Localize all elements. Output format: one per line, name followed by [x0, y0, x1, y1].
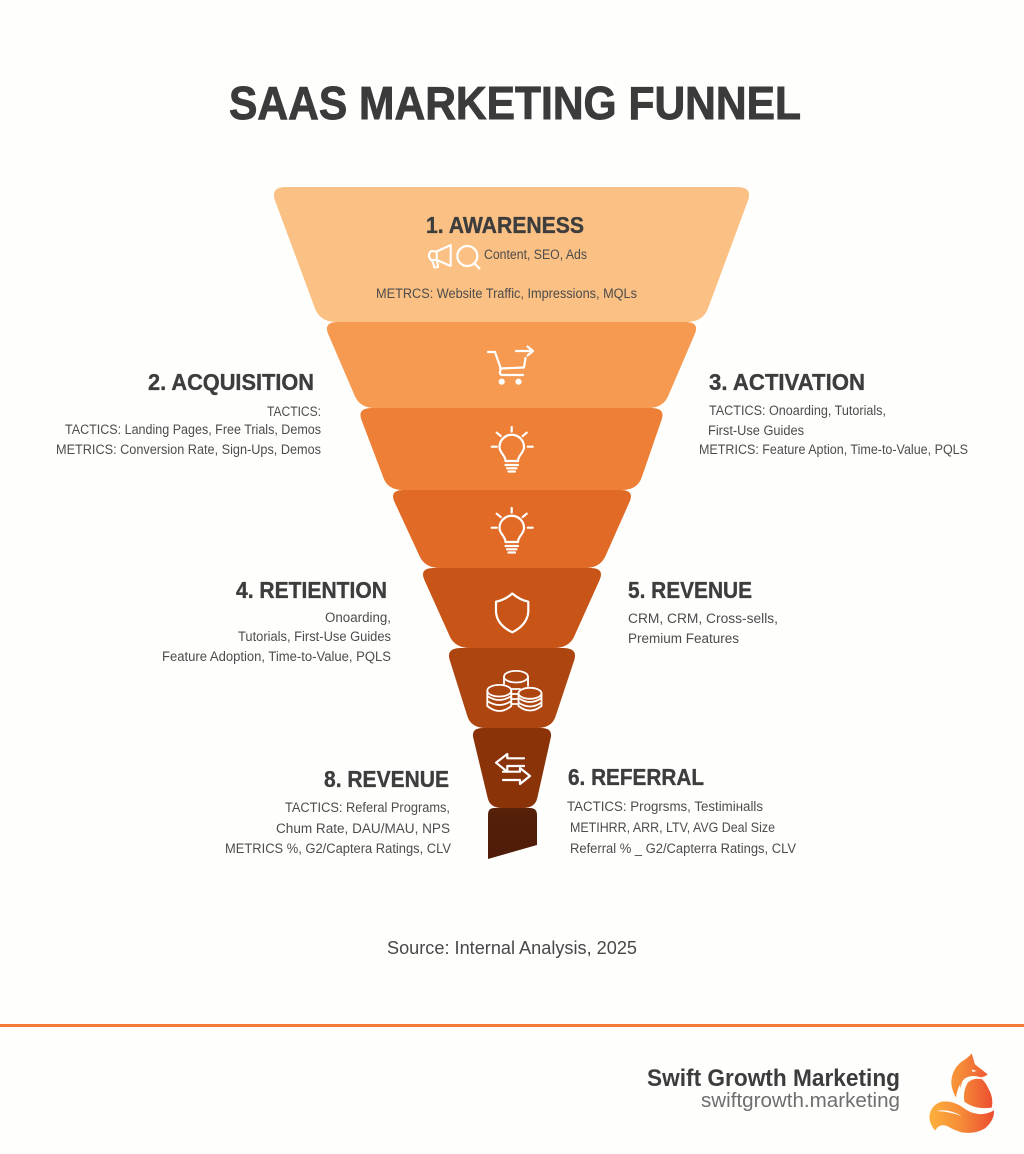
label: 8. revenue	[225, 766, 451, 856]
acquisition heading: 2. ACQUISITION	[148, 369, 314, 395]
activation tactics and metrics: First-Use Guides	[708, 423, 804, 438]
label: 2. acquisition	[56, 369, 321, 457]
icon: coins	[487, 671, 542, 711]
stage 1 metrics: METRCS: Website Traffic, Impressions, MQLs	[376, 286, 637, 301]
funnel stage 6	[449, 648, 575, 728]
revenue details	[628, 611, 778, 646]
retention heading: 4. RETIENTION	[236, 577, 387, 603]
icon: light bulb	[492, 427, 533, 472]
footer brand	[647, 1053, 994, 1133]
acquisition tactics and metrics	[56, 404, 321, 457]
retention details: Onoarding,	[325, 610, 391, 625]
funnel stage 7	[473, 728, 551, 808]
activation heading: 3. ACTIVATION	[709, 369, 865, 395]
revenue details	[225, 800, 451, 856]
title: SAAS MARKETING FUNNEL	[229, 77, 801, 129]
referral details	[567, 799, 796, 856]
funnel stage 2	[327, 322, 696, 408]
source note: Source: Internal Analysis, 2025	[387, 938, 637, 958]
funnel stage 4	[393, 490, 631, 568]
label: 6. referral	[567, 764, 796, 856]
referral heading: 6. REFERRAL	[568, 764, 704, 790]
label: 5. revenue	[628, 577, 778, 646]
revenue details: Chum Rate, DAU/MAU, NPS	[276, 821, 450, 836]
brand name: Swift Growth Marketing	[647, 1065, 900, 1092]
funnel	[274, 187, 749, 859]
acquisition tactics and metrics: METRICS: Conversion Rate, Sign-Ups, Demos	[56, 442, 321, 457]
activation tactics and metrics	[699, 403, 968, 457]
stage 1 tactics: Content, SEO, Ads	[484, 247, 587, 262]
acquisition tactics and metrics: TACTICS:	[267, 404, 321, 419]
funnel stage 5	[423, 568, 601, 648]
acquisition tactics and metrics: TACTICS: Landing Pages, Free Trials, Demos	[65, 422, 321, 437]
icon: magnifier	[457, 246, 480, 268]
funnel stage 1: awareness	[274, 187, 749, 322]
label: 3. activation	[699, 369, 968, 457]
revenue details: METRICS %, G2/Captera Ratings, CLV	[225, 841, 451, 856]
funnel stage 3	[360, 408, 663, 490]
revenue heading: 8. REVENUE	[324, 766, 449, 792]
funnel stage 8	[488, 808, 537, 859]
icon: light bulb	[492, 508, 533, 552]
icon: shopping cart	[488, 346, 533, 384]
revenue details: TACTICS: Referal Programs,	[285, 800, 450, 815]
label: 4. retention	[162, 577, 391, 664]
revenue details: Premium Features	[628, 631, 739, 646]
retention details: Tutorials, First-Use Guides	[238, 629, 391, 644]
revenue details: CRM, CRM, Cross-sells,	[628, 611, 778, 626]
retention details: Feature Adoption, Time-to-Value, PQLS	[162, 649, 391, 664]
icon: shield	[496, 594, 528, 632]
revenue heading: 5. REVENUE	[628, 577, 752, 603]
stage 1 heading: 1. AWARENESS	[426, 212, 584, 238]
icon: exchange arrows	[496, 754, 530, 784]
referral details: TACTICS: Progrsms, Testimiнalls	[567, 799, 763, 814]
icon: fox logo	[929, 1053, 994, 1133]
brand url: swiftgrowth.marketing	[701, 1090, 900, 1112]
activation tactics and metrics: TACTICS: Onoarding, Tutorials,	[709, 403, 886, 418]
referral details: METIHRR, ARR, LTV, AVG Deal Size	[570, 820, 775, 835]
icon: megaphone	[429, 245, 451, 268]
retention details	[162, 610, 391, 664]
activation tactics and metrics: METRICS: Feature Aption, Time-to-Value, PQLS	[699, 442, 968, 457]
referral details: Referral % _ G2/Capterra Ratings, CLV	[570, 841, 796, 856]
